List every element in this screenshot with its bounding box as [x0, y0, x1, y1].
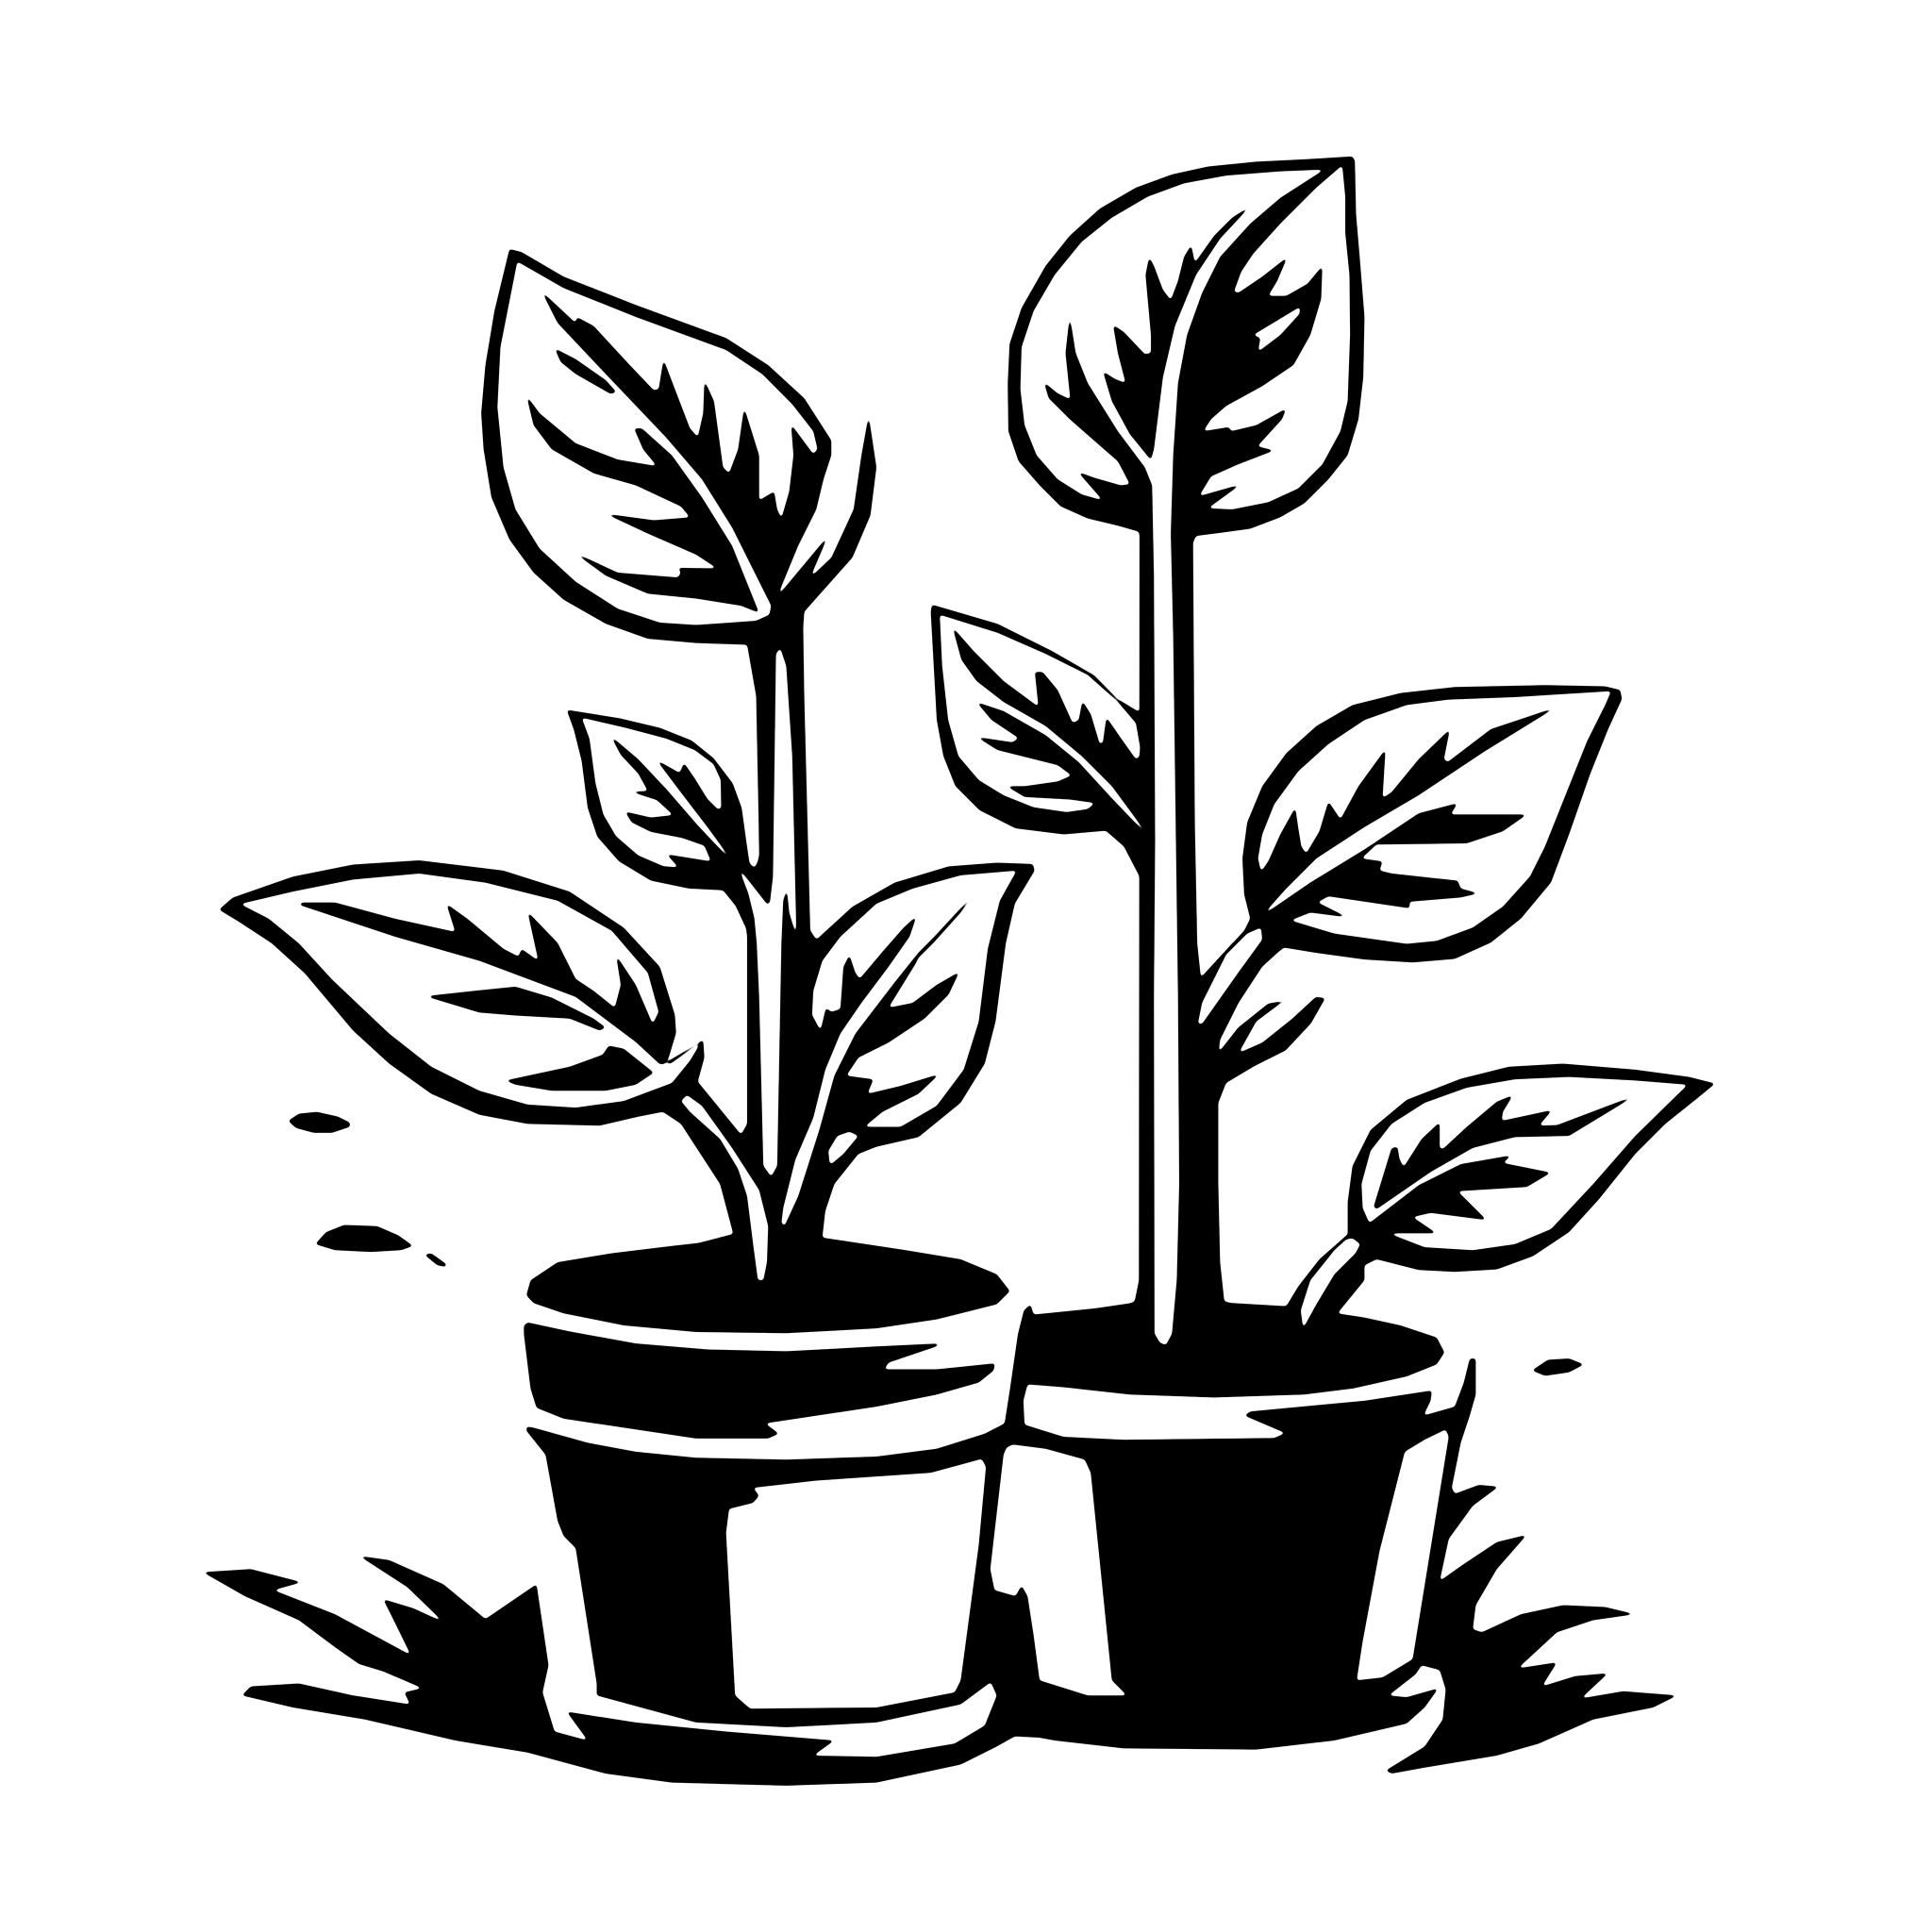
left stem — [739, 600, 823, 1274]
pot body and left grass — [203, 1305, 1038, 1786]
leaf: small right leaf — [1301, 1064, 1715, 1328]
leaf outline — [1338, 1064, 1715, 1313]
leaf outline — [1201, 685, 1622, 1053]
rim highlight — [1024, 1384, 1432, 1440]
lower veins — [526, 395, 759, 613]
right pot mass — [1007, 1303, 1677, 1774]
left stalk highlight — [681, 1095, 768, 1280]
leaf interior with veins — [1258, 691, 1611, 944]
left stem highlight — [739, 648, 796, 1176]
right leaf half — [1199, 165, 1350, 509]
speck 1 — [288, 1112, 350, 1133]
leaf: large lower-left leaf — [219, 860, 747, 1262]
leaf interior — [1361, 1077, 1688, 1250]
small vein — [555, 348, 617, 394]
leaf outline — [786, 863, 1035, 1262]
pot with soil, rim and ground shadow — [203, 1234, 1677, 1786]
pot right half and right grass — [991, 1303, 1677, 1774]
leaf outline — [481, 249, 876, 645]
speck 2 — [315, 1224, 413, 1252]
pot highlight left — [726, 1459, 986, 1708]
leaf: small centre leaf — [781, 863, 1035, 1262]
leaf outline — [931, 605, 1151, 876]
left leaf half, midrib and stem strip — [1021, 170, 1324, 1345]
leaf interior and midrib — [781, 871, 1017, 1226]
leaf interior — [497, 261, 818, 625]
middle vein — [429, 987, 606, 1030]
pot highlight right — [1357, 1429, 1449, 1680]
leaf: top left leaf — [481, 249, 876, 645]
leaf: top right leaf — [1008, 157, 1364, 1345]
leaf interior — [242, 874, 701, 1108]
pot left half, soil and grass — [203, 1234, 1038, 1786]
pot highlight centre — [991, 1444, 1127, 1695]
leaf stalk highlight — [1198, 927, 1262, 1024]
leaf veins — [1374, 1095, 1637, 1209]
leaf veins — [953, 626, 1151, 840]
small highlight — [828, 1132, 858, 1164]
leaf outline — [1008, 157, 1364, 542]
soil specks left — [288, 1112, 446, 1267]
leaf interior — [940, 615, 1151, 840]
leaf veins — [1103, 205, 1252, 460]
leaf stalk highlight — [1301, 1239, 1360, 1328]
speck 3 — [424, 1253, 446, 1267]
soil speck right — [1532, 1358, 1584, 1376]
leaf: large right leaf — [1198, 685, 1622, 1053]
small highlight — [1253, 307, 1300, 352]
pot rim band — [524, 1323, 995, 1439]
leaf outline — [219, 860, 747, 1262]
leaf: small upper-left leaf — [567, 709, 774, 930]
leaf: middle right leaf — [931, 605, 1151, 876]
soil — [526, 1234, 1010, 1333]
lower vein — [506, 1045, 654, 1091]
main stem — [1030, 534, 1364, 1364]
leaf interior — [582, 718, 729, 868]
leaf outline — [567, 709, 774, 930]
